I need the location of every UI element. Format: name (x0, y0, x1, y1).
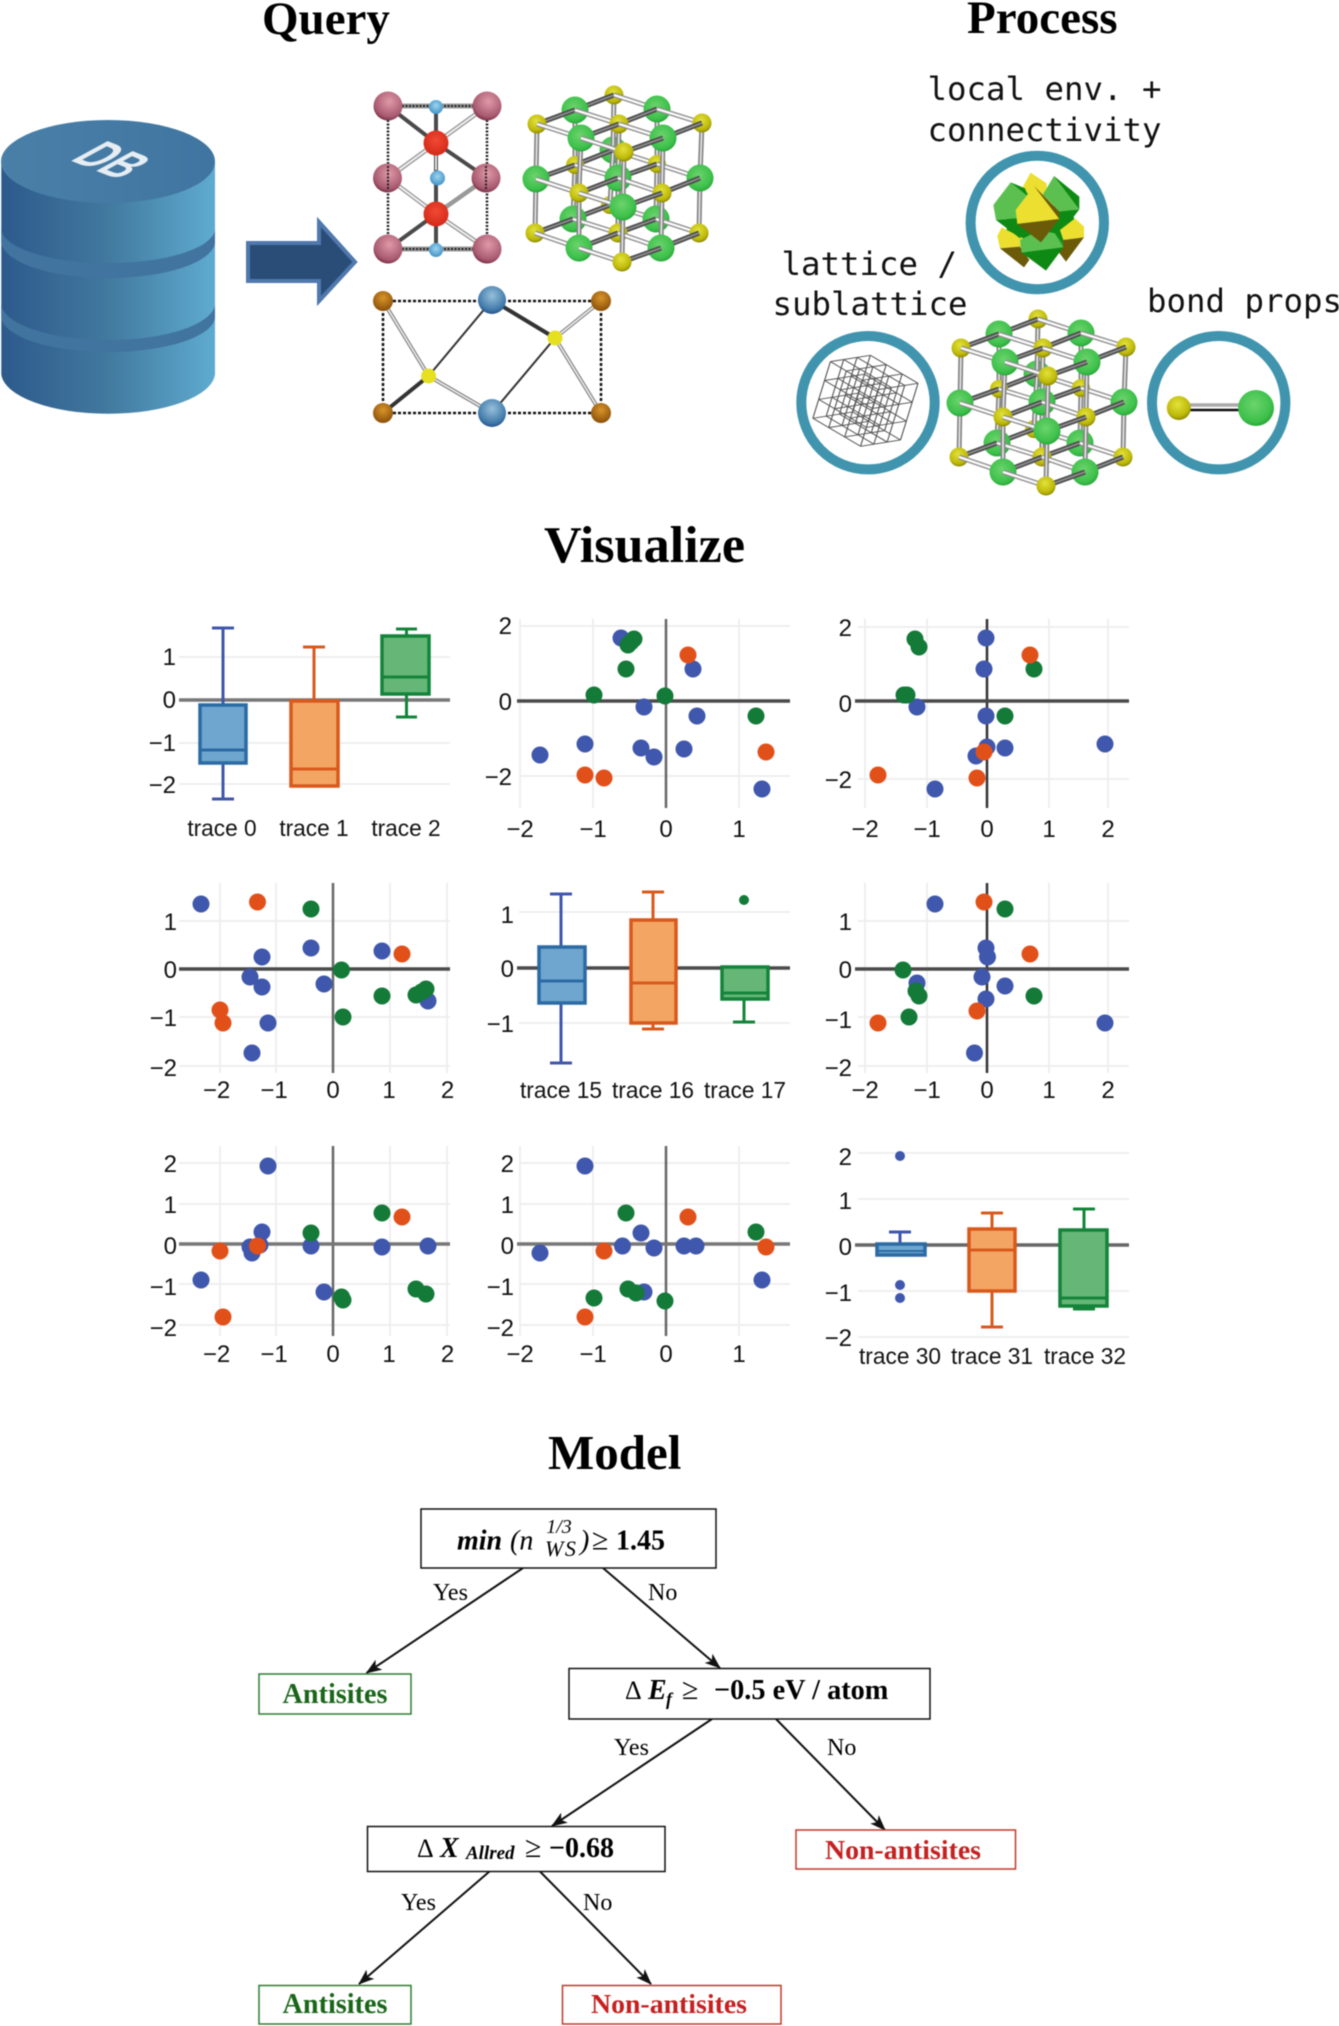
leaf: Non-antisites (562, 1986, 781, 2024)
node: Allred electronegativity condition: −0.68 (549, 1833, 614, 1864)
edge label: Yes: Yes (401, 1890, 436, 1916)
crystal structure: process lattice (946, 310, 1138, 496)
box plot: trace 15, 16, 17: 0 (501, 956, 514, 983)
leaf: Non-antisites: Non-antisites (825, 1835, 981, 1866)
box plot: trace 15, 16, 17: trace 17 (704, 1077, 786, 1103)
box plot: trace 30, 31, 32: 0 (839, 1234, 852, 1261)
scatter plot: row 2 column 1: 1 (164, 909, 177, 936)
scatter plot: row 2 column 3: 1 (839, 909, 852, 936)
label: local env. + connectivity: local env. + (928, 70, 1162, 108)
title: Visualize: Visualize (544, 516, 745, 574)
scatter plot: row 3 column 1: 0 (326, 1341, 340, 1368)
label: bond props: bond props (1147, 282, 1339, 320)
scatter plot: row 1 column 3: 2 (839, 615, 852, 642)
leaf: Non-antisites (796, 1830, 1016, 1869)
label: local env. + connectivity: connectivity (928, 111, 1162, 149)
scatter plot: row 2 column 3: 0 (980, 1077, 994, 1104)
icon: polyhedra in ring (971, 156, 1104, 289)
scatter plot: row 3 column 1 (150, 1146, 454, 1368)
box plot: trace 30, 31, 32 (825, 1144, 1129, 1369)
scatter plot: row 1 column 3: −2 (851, 816, 879, 843)
box plot: trace 0, 1, 2: −1 (149, 730, 176, 757)
arrow: formation energy to electronegativity (552, 1719, 712, 1826)
scatter plot: row 3 column 1: 1 (164, 1192, 177, 1219)
node: formation energy condition: f (666, 1689, 674, 1709)
scatter plot: row 2 column 1 (150, 883, 454, 1104)
scatter plot: row 2 column 3: 0 (839, 957, 852, 984)
node: formation energy condition (569, 1668, 930, 1719)
scatter plot: row 3 column 2 (487, 1146, 790, 1368)
box plot: trace 0, 1, 2: trace 0 (187, 815, 257, 841)
scatter plot: row 1 column 2: −2 (506, 816, 534, 843)
box plot: trace 15, 16, 17: trace 15 (520, 1077, 602, 1103)
panel: query (1, 0, 714, 427)
node: min n_ws condition: (n (510, 1526, 533, 1556)
scatter plot: row 3 column 1: −1 (150, 1274, 177, 1301)
scatter plot: row 1 column 2: −2 (485, 764, 512, 791)
scatter plot: row 3 column 1: 2 (441, 1341, 454, 1368)
box plot: trace 30, 31, 32: 1 (839, 1188, 852, 1215)
node: min n_ws condition: ) (578, 1526, 589, 1556)
scatter plot: row 2 column 1: −2 (150, 1055, 177, 1082)
label: local env. + connectivity (928, 70, 1162, 149)
scatter plot: row 1 column 3 (825, 615, 1129, 843)
scatter plot: row 2 column 3: −2 (851, 1077, 879, 1104)
box plot: trace 0, 1, 2: trace 1 (279, 815, 349, 841)
scatter plot: row 3 column 1: −1 (260, 1341, 288, 1368)
scatter plot: row 3 column 2: 0 (659, 1341, 673, 1368)
box plot: trace 15, 16, 17: −1 (487, 1011, 514, 1038)
scatter plot: row 1 column 2: −1 (579, 816, 607, 843)
label: lattice / sublattice (772, 245, 968, 323)
box plot: trace 30, 31, 32: −2 (825, 1325, 852, 1352)
scatter plot: row 3 column 1: −2 (150, 1315, 177, 1342)
scatter plot: row 2 column 1: 0 (164, 957, 177, 984)
arrow: electronegativity to antisites (359, 1871, 490, 1984)
arrow: query to structures (248, 222, 355, 301)
scatter plot: row 2 column 1: −2 (203, 1077, 230, 1104)
edge label: Yes: Yes (433, 1580, 468, 1606)
scatter plot: row 3 column 1: 2 (164, 1151, 177, 1178)
node: min n_ws condition: min (457, 1526, 502, 1556)
box plot: trace 15, 16, 17: 1 (501, 902, 514, 929)
leaf: Antisites (259, 1986, 411, 2024)
crystal structure: green and yellow lattice (522, 86, 714, 272)
scatter plot: row 1 column 3: −2 (825, 767, 852, 794)
leaf: Antisites: Antisites (283, 1989, 387, 2020)
box plot: trace 15, 16, 17: trace 16 (612, 1077, 694, 1103)
scatter plot: row 2 column 1: 1 (382, 1077, 396, 1104)
scatter plot: row 3 column 2: 0 (501, 1233, 514, 1260)
panel: visualize (149, 516, 1129, 1369)
box plot: trace 0, 1, 2: 0 (163, 687, 176, 714)
scatter plot: row 3 column 2: −1 (579, 1341, 607, 1368)
scatter plot: row 1 column 2 (485, 613, 790, 843)
scatter plot: row 3 column 2: −2 (506, 1341, 534, 1368)
scatter plot: row 2 column 3 (825, 883, 1129, 1104)
scatter plot: row 2 column 1: −1 (260, 1077, 288, 1104)
edge label: Yes: Yes (614, 1735, 649, 1761)
node: formation energy condition: E (647, 1675, 667, 1706)
box plot: trace 0, 1, 2: 1 (163, 644, 176, 671)
scatter plot: row 3 column 2: −1 (487, 1274, 514, 1301)
node: Allred electronegativity condition: Δ (417, 1834, 434, 1863)
scatter plot: row 2 column 1: 2 (441, 1077, 454, 1104)
scatter plot: row 1 column 2: 0 (659, 816, 673, 843)
box plot: trace 30, 31, 32: 2 (839, 1144, 852, 1171)
arrow: formation energy to non-antisites (776, 1719, 885, 1830)
scatter plot: row 3 column 1: 0 (164, 1233, 177, 1260)
node: formation energy condition: ≥ (682, 1673, 698, 1706)
node: Allred electronegativity condition: Allred (465, 1843, 515, 1864)
node: min n_ws condition: 1.45 (616, 1526, 665, 1556)
leaf: Antisites: Antisites (283, 1679, 387, 1710)
crystal structure: brown, blue and yellow atoms (373, 286, 611, 427)
scatter plot: row 1 column 3: 1 (1042, 816, 1056, 843)
scatter plot: row 3 column 2: −2 (487, 1315, 514, 1342)
arrow: electronegativity to non-antisites (540, 1871, 651, 1984)
box plot: trace 0, 1, 2: trace 2 (371, 815, 441, 841)
label: lattice / sublattice: sublattice (772, 285, 968, 323)
node: min n_ws condition: ≥ (592, 1524, 608, 1556)
scatter plot: row 2 column 3: 1 (1042, 1077, 1056, 1104)
node: min n_ws condition: 1/3 (546, 1516, 572, 1538)
scatter plot: row 1 column 3: 0 (839, 691, 852, 718)
scatter plot: row 1 column 2: 0 (499, 689, 512, 716)
node: Allred electronegativity condition: ≥ (525, 1831, 541, 1864)
scatter plot: row 2 column 3: −1 (825, 1007, 852, 1034)
box plot: trace 0, 1, 2 (149, 628, 450, 841)
panel: model decision tree (259, 1425, 1016, 2024)
scatter plot: row 1 column 2: 1 (732, 816, 746, 843)
label: lattice / sublattice: lattice / (782, 245, 957, 283)
arrow: root to formation energy (603, 1568, 720, 1668)
scatter plot: row 3 column 2: 2 (501, 1151, 514, 1178)
box plot: trace 30, 31, 32: trace 31 (951, 1343, 1033, 1369)
leaf: Non-antisites: Non-antisites (591, 1989, 747, 2020)
icon: lattice grid in ring (801, 336, 935, 469)
node: Allred electronegativity condition: X (439, 1833, 460, 1864)
edge label: No: No (827, 1735, 856, 1761)
box plot: trace 30, 31, 32: −1 (825, 1280, 852, 1307)
box plot: trace 15, 16, 17 (487, 892, 790, 1103)
node: formation energy condition: −0.5 eV / atom (714, 1675, 889, 1706)
scatter plot: row 3 column 1: 1 (382, 1341, 396, 1368)
scatter plot: row 1 column 3: 2 (1101, 816, 1115, 843)
icon: database cylinder (1, 120, 215, 414)
scatter plot: row 2 column 1: 0 (326, 1077, 340, 1104)
leaf: Antisites (259, 1674, 411, 1714)
scatter plot: row 1 column 3: −1 (913, 816, 941, 843)
node: min n_ws condition (421, 1509, 716, 1568)
scatter plot: row 3 column 2: 1 (732, 1341, 746, 1368)
icon: bond in ring (1152, 336, 1285, 469)
node: Allred electronegativity condition (368, 1826, 665, 1872)
scatter plot: row 3 column 2: 1 (501, 1192, 514, 1219)
scatter plot: row 2 column 1: −1 (150, 1005, 177, 1032)
node: formation energy condition: Δ (625, 1676, 642, 1705)
scatter plot: row 1 column 3: 0 (980, 816, 994, 843)
icon: database cylinder: DB (57, 134, 166, 186)
arrow: root to antisites (366, 1568, 523, 1673)
box plot: trace 0, 1, 2: −2 (149, 772, 176, 799)
scatter plot: row 3 column 1: −2 (203, 1341, 230, 1368)
edge label: No: No (648, 1580, 677, 1606)
scatter plot: row 2 column 3: −2 (825, 1055, 852, 1082)
panel: process (772, 0, 1339, 496)
scatter plot: row 2 column 3: 2 (1101, 1077, 1115, 1104)
box plot: trace 30, 31, 32: trace 32 (1044, 1343, 1126, 1369)
scatter plot: row 2 column 3: −1 (913, 1077, 941, 1104)
box plot: trace 30, 31, 32: trace 30 (859, 1343, 941, 1369)
title: Model: Model (548, 1425, 681, 1480)
node: min n_ws condition: WS (545, 1536, 577, 1561)
scatter plot: row 1 column 2: 2 (499, 613, 512, 640)
crystal structure: pink, red and blue atoms (373, 92, 502, 264)
edge label: No: No (583, 1890, 612, 1916)
